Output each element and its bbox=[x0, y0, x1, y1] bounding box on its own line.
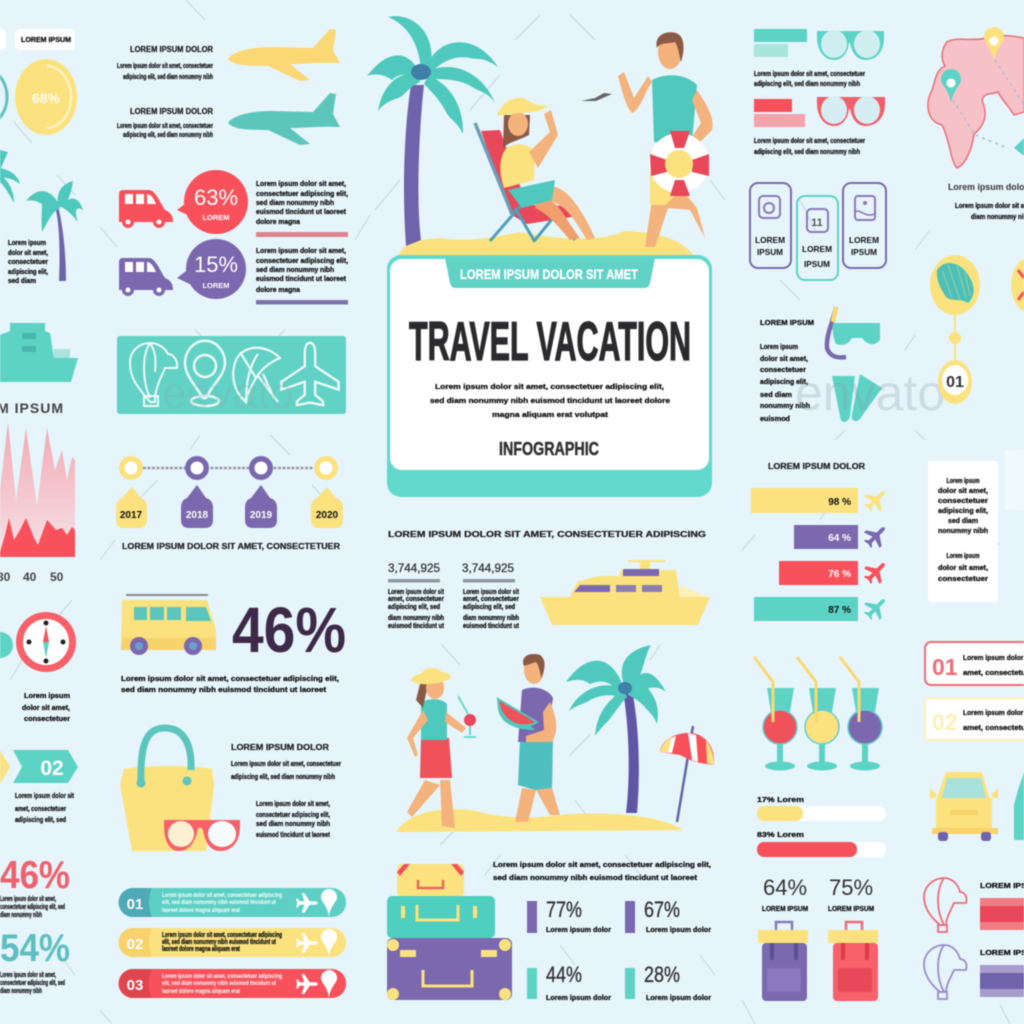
body: magna aliquam erat volutpat bbox=[492, 412, 609, 419]
text block: consectetuer adipiscing elit, bbox=[256, 258, 348, 265]
text block: adipiscing elit, bbox=[8, 269, 48, 276]
icon: purple backpack bbox=[758, 922, 808, 1001]
white note: nonummy nibh bbox=[938, 528, 988, 535]
compass caption bbox=[22, 693, 70, 723]
text block bbox=[0, 896, 65, 919]
palm tree bbox=[367, 16, 498, 246]
arrow tag 02: 02 bbox=[40, 757, 64, 780]
bar 76: 76 % bbox=[828, 569, 851, 580]
stat 67 bbox=[625, 897, 711, 934]
white note: adipiscing elit, bbox=[938, 508, 988, 515]
map bbox=[928, 36, 1024, 168]
icon: red backpack bbox=[828, 922, 878, 1001]
text below arrow: amet, consectetuer bbox=[15, 806, 66, 813]
bar 64: 64 % bbox=[828, 533, 851, 544]
icon: teal sunglasses bbox=[817, 30, 884, 60]
text block: Lorem ipsum dolor sit amet, consectetuer adipiscing elit, bbox=[121, 676, 339, 683]
icon: teal car fragment bbox=[1014, 772, 1024, 840]
text: Lorem ipsum dolor sit amet, consectetuer bbox=[754, 138, 865, 145]
node 2020 bbox=[311, 456, 343, 528]
bag text: euismod tincidunt ut laoreet bbox=[256, 832, 331, 839]
card: camera bbox=[750, 183, 791, 268]
icon: yellow cocktail bbox=[797, 657, 839, 770]
card: calendar: LOREM bbox=[802, 244, 832, 254]
white note: Lorem ipsum bbox=[946, 478, 980, 485]
pill 01 bbox=[118, 888, 346, 917]
progress 83: 83% Lorem bbox=[757, 832, 804, 839]
icon: straw bag with glasses bbox=[120, 728, 240, 851]
palm tree bbox=[566, 645, 666, 813]
heading bars: LOREM IPSUM DOLOR bbox=[768, 462, 865, 471]
bar 98: 98 % bbox=[828, 497, 851, 508]
white note: Lorem ipsum bbox=[946, 553, 980, 560]
arrow tag 02 bbox=[13, 750, 78, 783]
body: Lorem ipsum dolor sit amet, consectetuer adipiscing elit, bbox=[435, 384, 664, 391]
tab bbox=[445, 258, 655, 288]
intro text bbox=[493, 862, 711, 882]
ship teal bbox=[0, 323, 78, 382]
white note: dolor sit amet, bbox=[938, 565, 988, 572]
panel: second column bbox=[116, 29, 348, 998]
woman walking bbox=[407, 668, 476, 828]
timeline caption: LOREM IPSUM DOLOR SIT AMET, CONSECTETUER bbox=[122, 542, 340, 551]
node 2019: 2019 bbox=[250, 510, 273, 521]
text block: Lorem ipsum dolor sit amet, bbox=[256, 181, 346, 188]
progress 17: 17% Lorem bbox=[757, 797, 804, 804]
beach umbrella bbox=[660, 726, 714, 822]
divider red bbox=[256, 232, 348, 237]
heading: LOREM IPSUM DOLOR SIT AMET, CONSECTETUER ADIPISCING bbox=[388, 530, 706, 539]
stat block bbox=[462, 561, 520, 630]
bag text: sed diam nonummy nibh bbox=[256, 821, 330, 828]
bag text: LOREM IPSUM DOLOR bbox=[231, 743, 329, 752]
icon: umbrella outline bbox=[233, 348, 280, 402]
man with watermelon bbox=[498, 654, 560, 822]
bar 64 bbox=[794, 520, 892, 552]
card: camera: IPSUM bbox=[757, 247, 783, 257]
snorkel text: Lorem ipsum bbox=[760, 344, 798, 351]
text block: euismod tincidunt ut laoreet bbox=[256, 276, 347, 283]
white note: consectetuer bbox=[938, 498, 988, 505]
card: calendar: 11 bbox=[811, 217, 823, 229]
card: image: IPSUM bbox=[851, 247, 877, 257]
bar 87 bbox=[754, 592, 892, 624]
stat block: amet, consectetuer bbox=[463, 596, 519, 603]
tab: LOREM IPSUM DOLOR SIT AMET bbox=[460, 266, 638, 282]
text block: Lorem ipsum dolor sit amet, bbox=[256, 248, 346, 255]
text block: Lorem ipsum dolor sit amet, bbox=[0, 972, 56, 979]
white note: consectetuer bbox=[938, 576, 988, 583]
pill 03: laoreet dolore magna aliquam erat bbox=[162, 988, 241, 995]
panel: left edge column bbox=[0, 29, 83, 995]
text block bbox=[8, 240, 48, 285]
text bbox=[754, 71, 865, 88]
compass caption: consectetuer bbox=[24, 716, 70, 723]
snorkel text bbox=[760, 320, 814, 423]
icon: red sunglasses bbox=[817, 96, 885, 126]
compass bbox=[16, 612, 76, 672]
icon: shell badge bbox=[930, 255, 980, 315]
icon: purple balloon bbox=[924, 945, 967, 999]
box 01 bbox=[925, 642, 1024, 685]
body bbox=[430, 384, 670, 419]
stat block: euismod tincidunt ut bbox=[388, 623, 445, 630]
bag text: consectetuer adipiscing elit, bbox=[256, 812, 330, 819]
subtitle: INFOGRAPHIC bbox=[499, 439, 599, 459]
icon: yellow plane bbox=[228, 29, 340, 81]
bar 98 bbox=[751, 484, 892, 516]
stat 54 percent: 54% bbox=[0, 927, 70, 970]
partial palm bbox=[0, 150, 20, 203]
panel: center lower bbox=[387, 530, 714, 1002]
watermark: envato bbox=[795, 365, 945, 421]
compass caption: Lorem ipsum bbox=[24, 693, 70, 700]
stat 44: Lorem ipsum dolor bbox=[546, 995, 611, 1002]
text block: sed diam nonummy nibh euismod tincidunt ut laoreet bbox=[121, 687, 327, 694]
stat 28: Lorem ipsum dolor bbox=[646, 995, 711, 1002]
stat block: 3,744,925 bbox=[388, 561, 440, 575]
snorkel text: sed diam bbox=[760, 392, 792, 399]
pill 03 bbox=[118, 969, 346, 998]
text block bbox=[256, 248, 348, 294]
node 01: 01 bbox=[946, 374, 964, 391]
sand bbox=[396, 809, 683, 832]
bubble 15 percent: 15% bbox=[194, 252, 238, 277]
arrow tag yellow bbox=[0, 750, 10, 784]
bar 76 bbox=[779, 556, 892, 588]
plane heading teal: Lorem ipsum dolor sit amet, consectetuer bbox=[117, 123, 213, 130]
white fragment bbox=[1005, 450, 1024, 510]
icon: purple van bbox=[119, 258, 173, 296]
card: calendar bbox=[797, 196, 838, 280]
intro text: sed diam nonummy nibh euismod tincidunt ut laoreet bbox=[493, 875, 698, 882]
text block: dolore magna bbox=[256, 287, 300, 294]
node 01 bbox=[938, 360, 972, 404]
icon: teal pin bbox=[941, 69, 961, 103]
text block: diam nonummy nibh bbox=[0, 988, 42, 995]
bars teal bbox=[754, 29, 807, 57]
palm tree bbox=[26, 181, 83, 281]
pill 02 bbox=[118, 928, 346, 957]
text: adipiscing elit, sed diam nonummy nibh bbox=[754, 149, 860, 156]
text block: sed diam nonummy nibh bbox=[256, 200, 334, 207]
stat 67: Lorem ipsum dolor bbox=[646, 927, 711, 934]
teal fragment bbox=[0, 632, 13, 658]
stat 77: Lorem ipsum dolor bbox=[546, 927, 611, 934]
stat block: diam nonummy nibh bbox=[388, 615, 444, 622]
bag text: adipiscing elit, sed diam nonummy nibh bbox=[231, 774, 335, 781]
bag text bbox=[231, 743, 341, 839]
stat block: 3,744,925 bbox=[462, 561, 514, 575]
chart axis labels: 40 bbox=[23, 570, 37, 584]
node 2018: 2018 bbox=[186, 510, 209, 521]
stat 75: LOREM IPSUM bbox=[828, 906, 874, 913]
pill 03: elit, sed diam nonummy nibh euismod tincidunt ut bbox=[162, 980, 277, 987]
stat 64: LOREM IPSUM bbox=[762, 906, 808, 913]
stat 75: 75% bbox=[829, 875, 873, 900]
text below arrow bbox=[15, 793, 75, 824]
pill 03: Lorem ipsum dolor sit amet, consectetuer adipiscing bbox=[162, 973, 282, 980]
plane heading yellow: adipiscing elit, sed diam nonummy nibh bbox=[123, 74, 213, 81]
card: image: LOREM bbox=[849, 235, 879, 245]
chart axis labels: 50 bbox=[50, 570, 64, 584]
icon: red van bbox=[119, 190, 173, 228]
text: Lorem ipsum dolor sit amet, consectetuer bbox=[754, 71, 865, 78]
text block: Lorem ipsum bbox=[8, 240, 46, 247]
icon: yellow pin bbox=[984, 27, 1004, 61]
stat block bbox=[388, 561, 445, 630]
icon: red balloon bbox=[924, 878, 967, 932]
icon: purple cocktail bbox=[840, 657, 882, 770]
icon: yellow bus bbox=[121, 594, 216, 655]
label pills: LOREM IPSUM bbox=[21, 37, 71, 44]
icon: suitcases bbox=[387, 864, 512, 1000]
stat 46 percent large: 46% bbox=[232, 594, 346, 666]
snorkel text: euismod bbox=[760, 416, 790, 423]
stat block: euismod tincidunt ut bbox=[463, 623, 520, 630]
text below arrow: adipiscing elit, sed bbox=[15, 817, 66, 824]
snorkel text: nonummy nibh bbox=[760, 403, 810, 410]
pill 02: laoreet dolore magna aliquam erat bbox=[162, 946, 240, 953]
text block bbox=[121, 676, 339, 694]
donut 68 percent: 68% bbox=[32, 90, 61, 106]
text block: consectetuer bbox=[8, 259, 48, 266]
node 2017: 2017 bbox=[120, 510, 143, 521]
text block: diam nonummy nibh bbox=[0, 912, 42, 919]
icon: plane outline bbox=[281, 343, 339, 405]
progress 17 bbox=[757, 797, 886, 821]
pill 02: elit, sed diam nonummy nibh euismod tincidunt ut bbox=[162, 939, 276, 946]
plane heading teal bbox=[117, 107, 213, 139]
white note bbox=[928, 461, 998, 602]
stat block: diam nonummy nibh bbox=[463, 615, 519, 622]
card: calendar: IPSUM bbox=[804, 259, 830, 269]
text below arrow: Lorem ipsum dolor sit bbox=[15, 793, 75, 800]
white note: dolor sit amet, bbox=[938, 488, 988, 495]
plane heading yellow: Lorem ipsum dolor sit amet, consectetuer bbox=[117, 63, 213, 70]
beach chair bbox=[475, 123, 578, 242]
stat 67: 67% bbox=[644, 897, 680, 922]
stat block: adipiscing elit, sed bbox=[463, 604, 515, 611]
icon: flippers bbox=[832, 374, 882, 422]
woman sitting bbox=[497, 98, 595, 240]
pill 01: elit, sed diam nonummy nibh euismod tincidunt ut bbox=[162, 899, 277, 906]
stat 64 bbox=[762, 875, 808, 913]
stat 75 bbox=[828, 875, 874, 913]
stat 77 bbox=[527, 897, 611, 934]
box 02: 02 bbox=[932, 709, 958, 735]
map caption bbox=[948, 182, 1024, 221]
pill 02: 02 bbox=[127, 936, 143, 953]
intro text: Lorem ipsum dolor sit amet, consectetuer adipiscing elit, bbox=[493, 862, 711, 869]
bubble 63 percent: LOREM bbox=[202, 213, 230, 222]
text block bbox=[0, 972, 65, 995]
stat block: amet, consectetuer bbox=[388, 596, 444, 603]
text block: sed diam bbox=[8, 278, 36, 285]
plane heading teal: adipiscing elit, sed diam nonummy nibh bbox=[123, 132, 213, 139]
label pills bbox=[0, 29, 75, 50]
progress 83 bbox=[757, 832, 886, 857]
area chart bbox=[0, 422, 75, 557]
bars red bbox=[754, 99, 805, 127]
plane heading yellow bbox=[117, 45, 213, 81]
node 2019 bbox=[245, 456, 277, 528]
compass caption: dolor sit amet, bbox=[22, 705, 70, 712]
bar 87: 87 % bbox=[828, 605, 851, 616]
panel: right column bbox=[750, 27, 1024, 1001]
text block: consectetuer adipiscing elit, sed bbox=[0, 980, 65, 987]
pill 02: Lorem ipsum dolor sit amet, consectetuer adipiscing bbox=[162, 932, 282, 939]
icon: balloon outline bbox=[130, 343, 177, 406]
text block: consectetuer adipiscing elit, bbox=[256, 191, 348, 198]
node 2018 bbox=[181, 456, 213, 528]
plane heading yellow: LOREM IPSUM DOLOR bbox=[130, 45, 213, 54]
bag text: Lorem ipsum dolor sit amet, bbox=[256, 801, 330, 808]
route bbox=[953, 60, 1024, 147]
stat 28 bbox=[625, 962, 711, 1002]
bubble 63 percent: 63% bbox=[194, 185, 238, 210]
icon: yellow car front bbox=[930, 772, 998, 841]
text block bbox=[256, 181, 348, 226]
text block: dolore magna bbox=[256, 219, 300, 226]
text block: sed diam nonummy nibh bbox=[256, 267, 334, 274]
sand bbox=[398, 231, 694, 256]
badge fragment bbox=[1011, 255, 1024, 315]
text block: dolor sit amet, bbox=[8, 250, 48, 257]
box 01: 01 bbox=[932, 654, 958, 680]
stat 44: 44% bbox=[546, 962, 582, 987]
man with lifebuoy bbox=[618, 32, 713, 247]
card: camera: LOREM bbox=[755, 235, 785, 245]
donut 68 percent bbox=[15, 59, 77, 135]
panel: timeline bbox=[116, 456, 343, 528]
text block: Lorem ipsum dolor sit amet, bbox=[0, 896, 56, 903]
red bar bbox=[980, 898, 1024, 930]
icon: snorkel mask bbox=[827, 307, 880, 357]
white note: sed diam bbox=[948, 518, 978, 525]
plane heading teal: LOREM IPSUM DOLOR bbox=[130, 107, 213, 116]
bubble 15 percent bbox=[177, 239, 246, 299]
stat 44 bbox=[527, 962, 611, 1002]
watermark: eevato bbox=[162, 369, 294, 418]
stat 77: 77% bbox=[546, 897, 582, 922]
text bbox=[754, 138, 865, 156]
snorkel text: consectetuer bbox=[760, 367, 806, 374]
icon: yellow cruise ship bbox=[540, 560, 710, 625]
bubble 63 percent bbox=[177, 170, 248, 234]
pill 01: laoreet dolore magna aliquam erat bbox=[162, 907, 241, 914]
bag text: Lorem ipsum dolor sit amet, consectetuer bbox=[231, 761, 341, 768]
text: adipiscing elit, sed diam nonummy nibh bbox=[754, 81, 860, 88]
panel: icon band bbox=[117, 336, 346, 414]
divider purple bbox=[256, 300, 348, 304]
teal donut fragment bbox=[0, 64, 7, 130]
stat 64: 64% bbox=[763, 875, 807, 900]
snorkel text: LOREM IPSUM bbox=[760, 320, 814, 327]
node 2017 bbox=[116, 456, 147, 528]
body: sed diam nonummy nibh euismod tincidunt ut laoreet dolore bbox=[430, 398, 670, 405]
purple bar bbox=[980, 965, 1024, 997]
pill 01: Lorem ipsum dolor sit amet, consectetuer adipiscing bbox=[162, 892, 282, 899]
pill 01: 01 bbox=[127, 896, 143, 913]
node 2020: 2020 bbox=[316, 510, 339, 521]
connector bbox=[949, 315, 961, 365]
chart axis labels bbox=[0, 570, 64, 584]
icon: teal plane bbox=[228, 93, 340, 145]
pill 03: 03 bbox=[127, 977, 143, 994]
icon: seagull bbox=[581, 93, 612, 101]
title: TRAVEL VACATION bbox=[409, 310, 691, 372]
icon: pin outline bbox=[185, 341, 225, 406]
stat 46 percent: 46% bbox=[0, 854, 70, 897]
stat 28: 28% bbox=[644, 962, 680, 987]
stat block: adipiscing elit, sed bbox=[388, 604, 440, 611]
panel: title card bbox=[387, 255, 712, 497]
panel: top beach scene bbox=[367, 16, 713, 256]
icon: teal marker bbox=[1014, 138, 1024, 156]
text block: consectetuer adipiscing elit, sed bbox=[0, 904, 65, 911]
bubble 15 percent: LOREM bbox=[202, 281, 230, 290]
snorkel text: adipiscing elit, bbox=[760, 379, 808, 386]
text block: euismod tincidunt ut laoreet bbox=[256, 209, 347, 216]
snorkel text: dolor sit amet, bbox=[760, 356, 808, 363]
box 02 bbox=[925, 698, 1024, 740]
stat block: Lorem ipsum dolor sit bbox=[388, 589, 445, 596]
card: image bbox=[843, 183, 886, 268]
stat block: Lorem ipsum dolor sit bbox=[463, 589, 520, 596]
icon: red cocktail bbox=[754, 657, 797, 770]
